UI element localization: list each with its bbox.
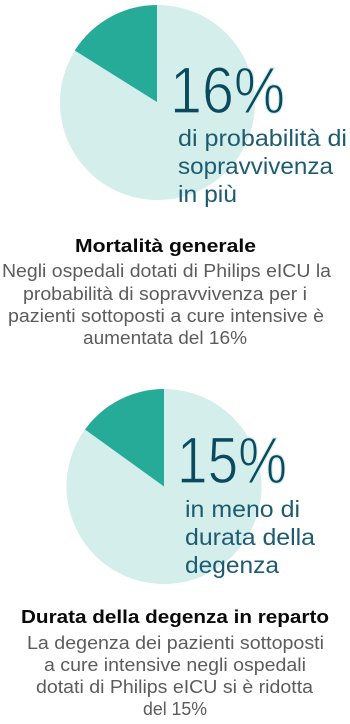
stat label: 15%: in meno di (185, 496, 300, 522)
stat label: 15%: durata della (185, 524, 315, 550)
pie remainder (60, 5, 255, 200)
stat: 15%: 15% (177, 423, 287, 497)
heading: mortality: Mortalità generale (75, 236, 256, 256)
text block: length of stay: La degenza dei pazienti sottoposti (27, 633, 324, 653)
pie wedge 16% (75, 5, 157, 102)
pie remainder (66, 389, 262, 584)
panel: mortality pie chart (60, 5, 255, 200)
stat label: 15% (185, 496, 315, 578)
text block: length of stay (27, 633, 324, 719)
stat label: 16% (178, 125, 347, 207)
pie wedge 15% (85, 389, 164, 486)
text block: length of stay: del 15% (143, 699, 207, 719)
text block: mortality: probabilità di sopravvivenza per i (23, 284, 307, 304)
heading: length of stay: Durata della degenza in reparto (21, 607, 329, 627)
text block: length of stay: dotati di Philips eICU si è ridotta (36, 677, 314, 697)
text block: length of stay: a cure intensive negli ospedali (44, 655, 306, 675)
stat label: 16%: sopravvivenza (178, 153, 333, 179)
text block: mortality (2, 261, 332, 348)
text block: mortality: aumentata del 16% (83, 328, 247, 348)
stat label: 16%: in più (178, 181, 237, 207)
stat label: 16%: di probabilità di (178, 125, 347, 151)
panel: length of stay pie chart (66, 389, 262, 584)
text block: mortality: Negli ospedali dotati di Philips eICU la (2, 261, 332, 281)
text block: mortality: pazienti sottoposti a cure intensive è (8, 306, 324, 326)
stat: 16%: 16% (170, 53, 285, 127)
stat label: 15%: degenza (185, 552, 279, 578)
